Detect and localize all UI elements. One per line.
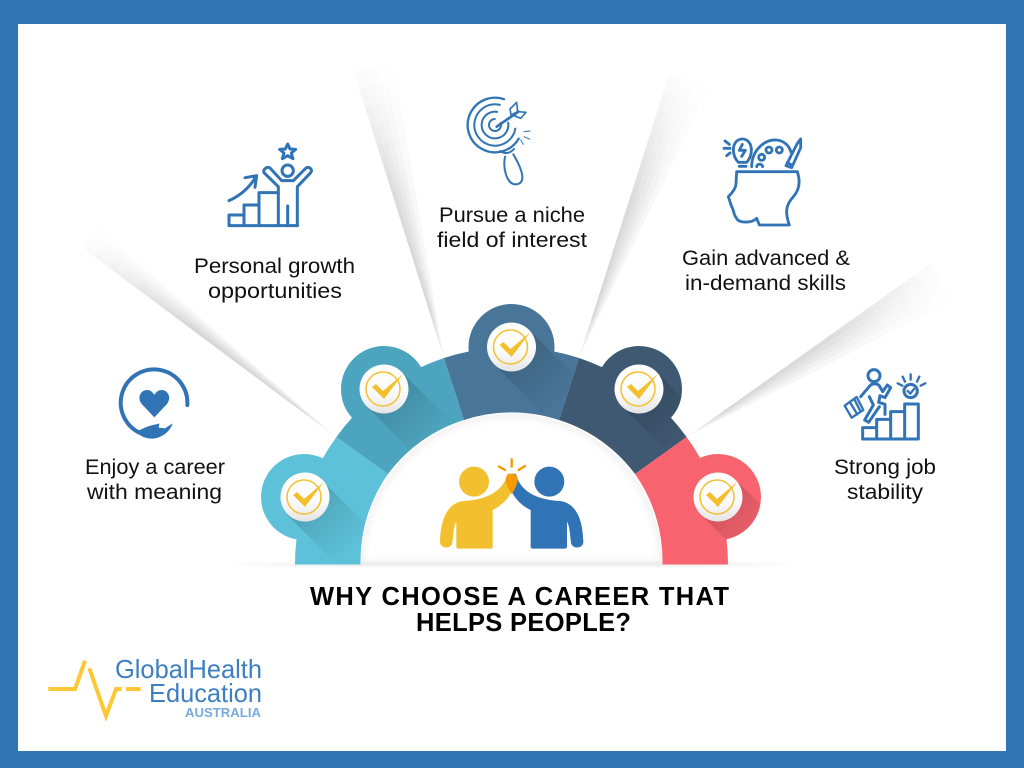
title: HELPS PEOPLE? [416,609,631,637]
segment 2: teal [336,346,464,474]
ray: advanced skills [687,257,965,437]
segment 1: light teal [261,437,388,564]
logo: Global Health Education Australia: Education [149,678,262,708]
label: personal growth: opportunities [208,279,342,303]
label: advanced skills: in-demand skills [685,271,846,295]
label: personal growth [194,254,355,303]
icon: target and magnifier [458,88,532,184]
check badge 3 [487,322,536,372]
ray: niche field [579,65,712,358]
check badge 4 [614,364,664,414]
label: enjoy a career: with meaning [86,480,222,504]
check badge 5 [694,472,742,522]
title: WHY CHOOSE A CAREER THAT [310,583,729,611]
logo: Global Health Education Australia: AUSTRALIA [185,706,261,720]
icon: personal growth [229,144,311,226]
segment 5: coral [635,437,761,564]
icon: climbing career steps [845,370,925,439]
check badge 2 [360,364,408,414]
icon: heartbeat line [48,661,141,716]
logo: Global Health Education Australia [48,654,262,720]
label: job stability: stability [847,480,923,504]
label: niche field: field of interest [437,228,587,252]
ray: career with meaning [80,212,336,437]
icon: heart in hand [121,369,187,439]
centre arch inner shadow [360,414,662,564]
segment 3: steel blue [444,304,579,420]
check badge 1 [280,472,330,522]
label: advanced skills: Gain advanced & [682,246,850,270]
label: personal growth: Personal growth [194,254,355,278]
label: niche field [437,203,587,252]
segment 4: navy [559,346,686,474]
ray: personal growth [350,56,444,358]
label: enjoy a career: Enjoy a career [85,455,225,479]
icon: high five [440,459,583,549]
icon: head with ideas [724,139,801,225]
title [310,583,729,637]
label: enjoy a career [85,455,225,504]
label: job stability: Strong job [834,455,936,479]
logo: Global Health Education Australia: GlobalHealth [115,654,262,684]
label: job stability [834,455,936,504]
label: advanced skills [682,246,850,295]
semicircle hub floor shadow [222,563,802,566]
label: niche field: Pursue a niche [439,203,585,227]
